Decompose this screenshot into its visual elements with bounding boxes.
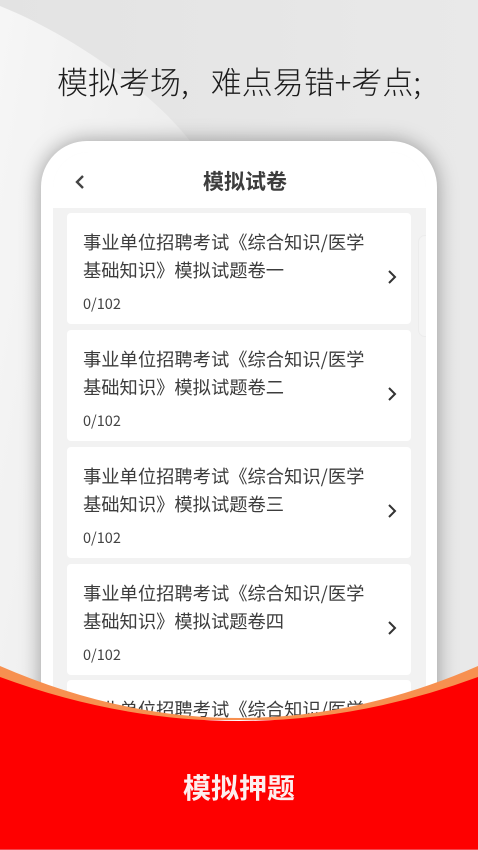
card title: 事业单位招聘考试《综合知识/医学 <box>83 463 364 489</box>
card title: 基础知识》模拟试题卷四 <box>83 608 284 634</box>
side handle <box>418 235 432 337</box>
card title: 事业单位招聘考试《综合知识/医学 <box>83 229 364 255</box>
app header <box>53 152 426 208</box>
icon: chevron <box>388 621 396 635</box>
card title <box>83 696 364 750</box>
card title <box>83 463 364 517</box>
exam card 3 <box>67 447 411 558</box>
title: 模拟考场, 难点易错+考点; <box>57 58 421 103</box>
red curved footer <box>0 666 478 850</box>
header title: 模拟试卷 <box>203 166 287 196</box>
card progress: 0/102 <box>83 644 121 665</box>
icon: chevron <box>388 504 396 518</box>
card progress: 0/102 <box>83 527 121 548</box>
phone mockup <box>41 141 437 850</box>
card title <box>83 229 364 283</box>
card title: 事业单位招聘考试《综合知识/医学 <box>83 696 364 722</box>
exam card 4 <box>67 564 411 675</box>
card title: 基础知识》模拟试题卷二 <box>83 374 284 400</box>
footer label: 模拟押题 <box>183 767 295 807</box>
red panel <box>0 677 478 850</box>
card title: 事业单位招聘考试《综合知识/医学 <box>83 346 364 372</box>
icon: chevron <box>388 387 396 401</box>
phone screen <box>53 152 426 850</box>
card progress: 0/102 <box>83 293 121 314</box>
exam card 5 <box>67 680 411 791</box>
card title: 基础知识》模拟试题卷一 <box>83 257 284 283</box>
icon: back arrow <box>75 175 84 189</box>
card progress: 0/102 <box>83 410 121 431</box>
card title: 基础知识》模拟试题卷五 <box>83 724 284 750</box>
card title: 基础知识》模拟试题卷三 <box>83 491 284 517</box>
card title <box>83 580 364 634</box>
card title: 事业单位招聘考试《综合知识/医学 <box>83 580 364 606</box>
exam card 2 <box>67 330 411 441</box>
orange curve edge <box>0 666 478 720</box>
icon: chevron <box>388 270 396 284</box>
exam card 1 <box>67 213 411 324</box>
card title <box>83 346 364 400</box>
